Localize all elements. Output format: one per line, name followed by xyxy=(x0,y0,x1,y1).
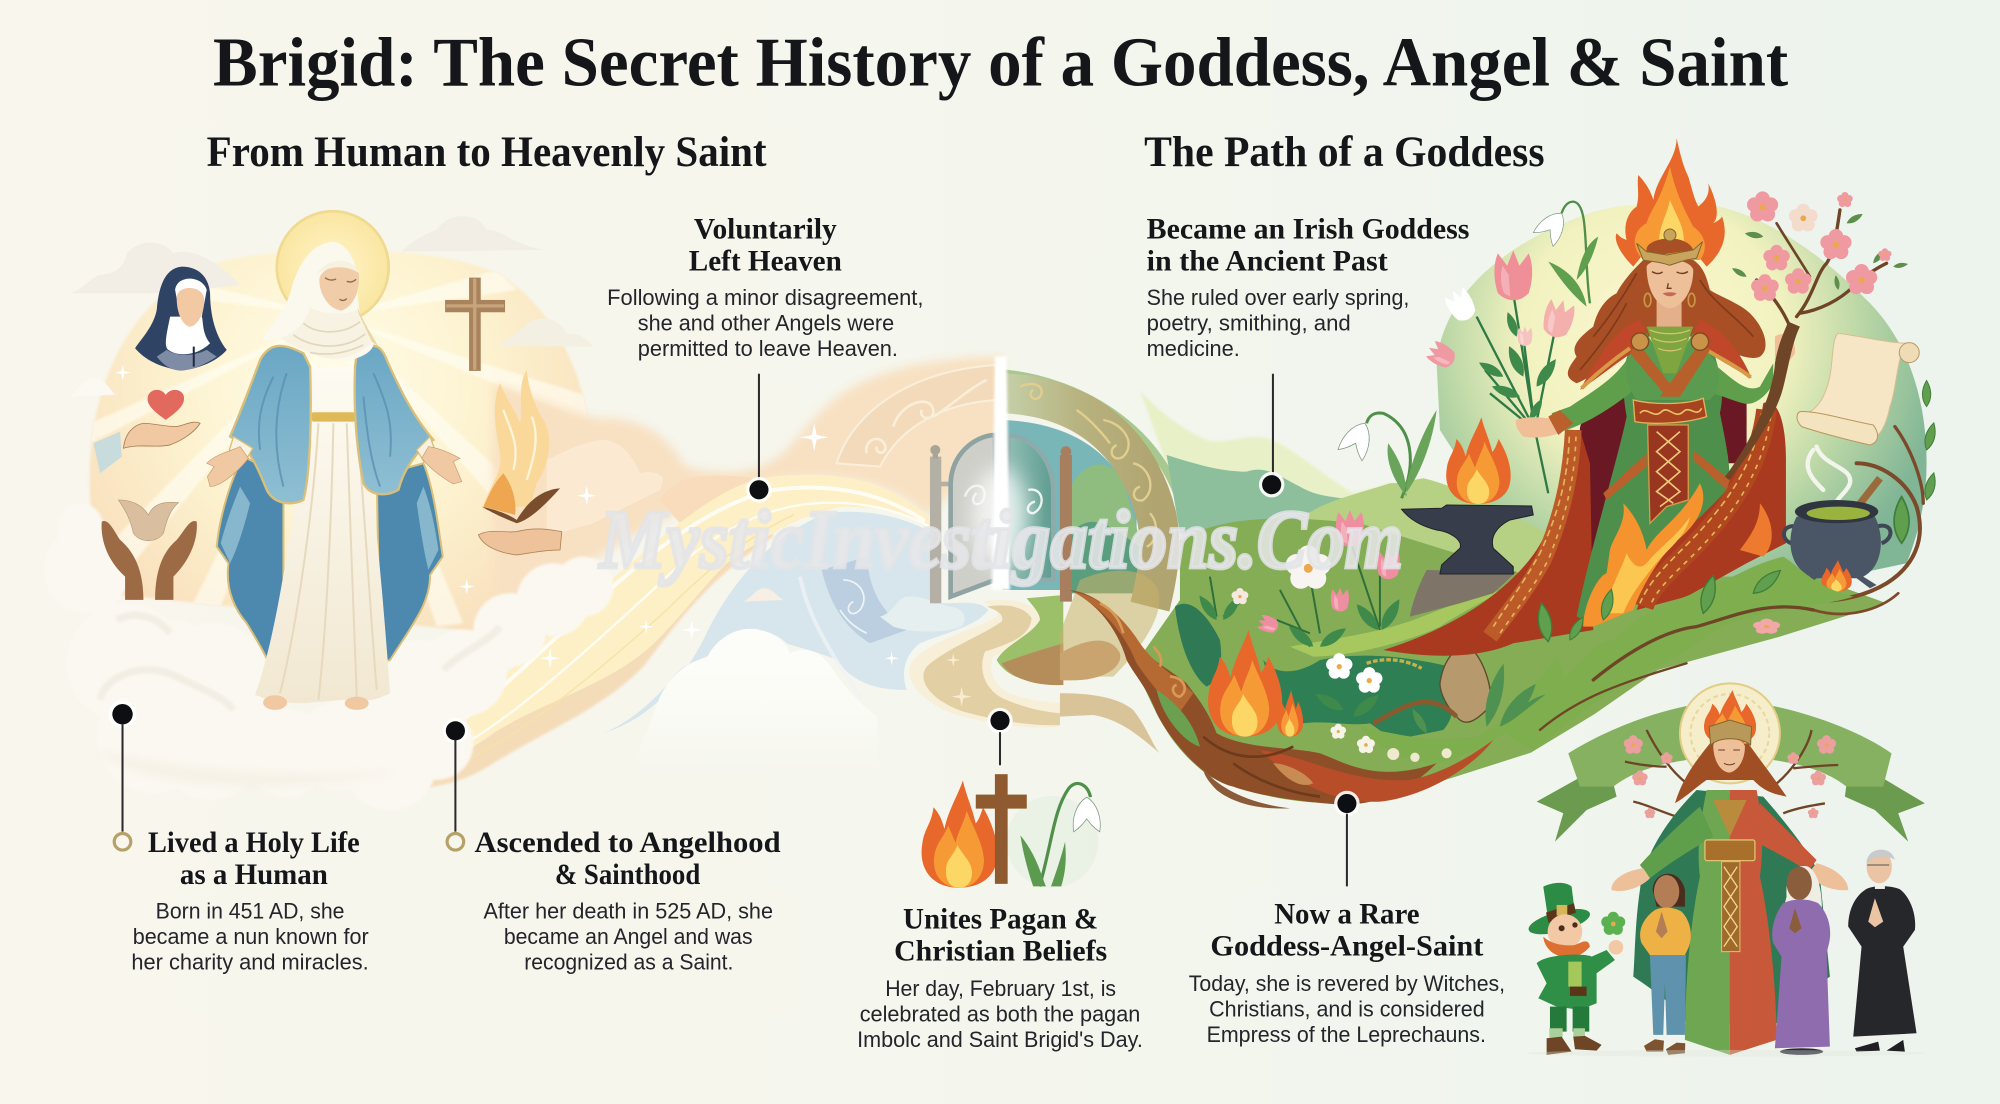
icon: heart on open hand xyxy=(93,390,200,473)
knot panel xyxy=(1722,862,1740,952)
robe right red xyxy=(1730,790,1777,1055)
text block: lived a holy life xyxy=(131,826,369,974)
flow of ribbons towards the gate xyxy=(353,357,1063,788)
gold sprig xyxy=(1367,660,1422,668)
illustration: modern Brigid and devotees xyxy=(1526,683,1927,1057)
text block: became an irish goddess xyxy=(1147,213,1469,361)
woman in yellow xyxy=(1640,874,1691,1055)
cape trims with gold knot xyxy=(1490,410,1771,637)
text block: lived a holy life: Born in 451 AD, she xyxy=(156,898,344,923)
left door xyxy=(951,435,995,597)
branches on the strip xyxy=(1540,607,1813,730)
robe left green xyxy=(1685,790,1730,1055)
halo xyxy=(1680,683,1780,783)
leprechaun xyxy=(1526,883,1625,1055)
green hill mid xyxy=(1167,455,1353,533)
snowdrop top xyxy=(1533,202,1598,307)
text block: ascended to angelhood: Ascended to Angelhood xyxy=(475,826,781,859)
text block: ascended to angelhood: After her death in 525 AD, she xyxy=(483,898,773,923)
text block: now a rare goddess-angel-saint: Goddess-Angel-Saint xyxy=(1210,929,1483,962)
text block: voluntarily left heaven xyxy=(607,213,923,361)
belt xyxy=(1705,840,1755,861)
carved stone xyxy=(1440,646,1491,722)
right sleeve xyxy=(1747,803,1817,872)
hair xyxy=(1568,257,1766,383)
background clouds xyxy=(70,216,593,397)
icon: dove and open hands xyxy=(102,500,197,600)
text block: now a rare goddess-angel-saint: Today, she is revered by Witches, xyxy=(1189,971,1505,996)
blue cloud xyxy=(880,596,965,632)
icon: wooden cross xyxy=(445,278,505,371)
text block: lived a holy life: became a nun known for xyxy=(133,924,369,949)
blossom branches xyxy=(1625,730,1838,817)
text block: voluntarily left heaven: Voluntarily xyxy=(694,213,837,246)
sand path tail xyxy=(1060,693,1160,753)
spring flowers xyxy=(1196,510,1452,762)
neck and face xyxy=(1657,300,1682,327)
bodice gold diamond xyxy=(1713,800,1747,837)
sleeves xyxy=(1552,360,1637,432)
arch lower swirls xyxy=(1060,571,1159,677)
white soft cloud xyxy=(627,629,880,783)
sparkles xyxy=(115,365,560,668)
leader line: lived a holy life xyxy=(108,700,137,850)
text block: now a rare goddess-angel-saint xyxy=(1189,897,1505,1047)
veil xyxy=(262,242,373,361)
text block: unites pagan and christian beliefs xyxy=(857,903,1143,1052)
centre panel with knot xyxy=(1648,425,1688,523)
leader line: unites beliefs xyxy=(987,708,1013,765)
title: Brigid: The Secret History of a Goddess, Angel & Saint xyxy=(213,23,1789,101)
text block: lived a holy life: her charity and miracles. xyxy=(131,949,369,974)
text block: became an irish goddess: She ruled over early spring, xyxy=(1147,285,1409,310)
red cape left xyxy=(1383,430,1593,656)
cauldron xyxy=(1784,447,1890,592)
round hill backdrop xyxy=(1437,202,1927,630)
left sleeve xyxy=(1640,807,1713,878)
blue sleeve right xyxy=(355,346,433,494)
white ribbon lines xyxy=(393,488,930,763)
text block: unites pagan and christian beliefs: Imbolc and Saint Brigid's Day. xyxy=(857,1027,1143,1052)
ground shadow xyxy=(1527,1050,1927,1057)
text block: unites pagan and christian beliefs: Christian Beliefs xyxy=(894,934,1107,967)
staff and blossoms xyxy=(1725,191,1908,480)
meadow under scene xyxy=(1380,577,1887,797)
text block: now a rare goddess-angel-saint: Now a Rare xyxy=(1274,897,1420,930)
scene: saint among clouds xyxy=(43,211,613,810)
cuffs and hands xyxy=(229,437,253,462)
text block: unites pagan and christian beliefs: Her day, February 1st, is xyxy=(885,976,1116,1001)
text block: now a rare goddess-angel-saint: Christians, and is considered xyxy=(1209,997,1485,1022)
scene: arch and green valley xyxy=(1003,373,1567,809)
peach cloud xyxy=(547,440,663,537)
gate right post xyxy=(1060,446,1072,602)
foreground cloud bank xyxy=(43,503,613,810)
text block: became an irish goddess: in the Ancient Past xyxy=(1147,244,1388,277)
text block: unites pagan and christian beliefs: Unites Pagan & xyxy=(903,903,1098,936)
woman in purple xyxy=(1772,866,1830,1055)
round hill and meadow behind goddess xyxy=(1380,202,1927,797)
scroll xyxy=(1797,333,1919,445)
green gown xyxy=(1577,350,1729,623)
icon: nun xyxy=(135,267,227,371)
grass and vine near stone xyxy=(1373,662,1555,735)
white light from gate xyxy=(992,357,1010,590)
hem flames xyxy=(1583,483,1703,627)
leader line: rare goddess-angel-saint xyxy=(1334,791,1360,886)
right door xyxy=(1008,435,1053,580)
cream ribbon band xyxy=(353,475,937,787)
layered scarf xyxy=(280,307,372,359)
text block: ascended to angelhood: & Sainthood xyxy=(555,858,701,891)
flame crown xyxy=(1616,138,1725,267)
goddess right hand xyxy=(1775,334,1795,363)
text block: voluntarily left heaven: Following a minor disagreement, xyxy=(607,285,923,310)
shoulder capes xyxy=(1580,320,1647,390)
red cape right xyxy=(1637,402,1786,610)
green banner xyxy=(1537,706,1925,842)
text block: lived a holy life: as a Human xyxy=(180,858,328,891)
white gown xyxy=(255,367,390,703)
long hair xyxy=(1675,743,1787,803)
celtic knot panel xyxy=(822,557,907,643)
goddess and surroundings xyxy=(1383,138,1938,750)
halo xyxy=(277,211,389,323)
celtic swirls on arch xyxy=(1020,384,1156,547)
text block: ascended to angelhood: became an Angel and was xyxy=(504,924,753,949)
icon: fire, cross and snowdrop xyxy=(922,774,1100,888)
small distant cloud xyxy=(743,588,783,602)
leader line: irish goddess xyxy=(1259,374,1284,497)
gate left post and bar xyxy=(930,445,954,603)
sparkles xyxy=(577,423,899,665)
lower grass strip xyxy=(1360,657,1567,763)
bouquet xyxy=(1424,250,1577,493)
dark cape lining xyxy=(1567,383,1640,613)
peach celtic arch xyxy=(837,365,997,467)
anvil xyxy=(1402,505,1533,574)
sand path xyxy=(909,600,1060,728)
snowdrop by the anvil xyxy=(1338,410,1437,498)
cape-side leaves and strip of grass xyxy=(1500,557,1853,750)
saint figure xyxy=(207,211,462,710)
forge flame xyxy=(1446,417,1511,504)
peach sky band xyxy=(493,357,1003,617)
gate xyxy=(930,357,1053,603)
crown xyxy=(1647,238,1693,257)
right vine xyxy=(1683,427,1923,640)
crossed bands xyxy=(1630,343,1680,397)
cloud shading xyxy=(100,615,500,710)
teal back cape xyxy=(1633,790,1830,1023)
main valley meadow xyxy=(1133,519,1567,803)
blue sleeve left xyxy=(230,346,311,503)
text block: unites pagan and christian beliefs: celebrated as both the pagan xyxy=(860,1002,1140,1027)
roots xyxy=(1070,590,1493,809)
bodice xyxy=(1626,333,1719,400)
leader line: ascended xyxy=(443,718,468,850)
text block: ascended to angelhood xyxy=(475,826,781,974)
flame crown xyxy=(1704,690,1756,745)
text block: voluntarily left heaven: permitted to leave Heaven. xyxy=(638,336,898,361)
text block: became an irish goddess: poetry, smithing, and xyxy=(1147,310,1351,335)
feet xyxy=(263,695,287,710)
heading: from human to heavenly saint: From Human to Heavenly Saint xyxy=(207,128,767,176)
side bands xyxy=(1603,453,1647,500)
rock under anvil xyxy=(1410,570,1517,617)
face xyxy=(1713,739,1745,773)
warm radiant egg behind saint xyxy=(90,249,590,643)
right arch band xyxy=(1003,373,1187,533)
deep green patches xyxy=(1175,604,1221,687)
text block: voluntarily left heaven: she and other Angels were xyxy=(638,310,894,335)
pale yellow wave xyxy=(1140,390,1393,533)
fire on the roots xyxy=(1208,630,1303,737)
text block: ascended to angelhood: recognized as a Saint. xyxy=(524,949,733,974)
face xyxy=(319,265,359,311)
deep blue mantle right xyxy=(377,463,443,663)
leaves xyxy=(1535,380,1938,643)
text block: voluntarily left heaven: Left Heaven xyxy=(689,244,842,277)
priest xyxy=(1848,850,1917,1052)
heading: the path of a goddess: The Path of a Goddess xyxy=(1144,128,1545,176)
leader line: left heaven xyxy=(746,374,772,503)
hands xyxy=(1611,868,1650,891)
pale blue flow xyxy=(603,512,988,733)
lower peach band xyxy=(353,497,773,788)
text block: became an irish goddess: Became an Irish Goddess xyxy=(1147,213,1469,246)
grass bright hill xyxy=(1303,478,1560,587)
belt xyxy=(1633,398,1707,423)
pink blossom on branch xyxy=(1753,619,1780,634)
watermark: MysticInvestigations.Com xyxy=(598,494,1403,587)
gold belt xyxy=(312,412,361,422)
text block: now a rare goddess-angel-saint: Empress of the Leprechauns. xyxy=(1207,1022,1486,1047)
sky inside arch xyxy=(1003,420,1137,590)
deep blue mantle left xyxy=(217,457,283,667)
green mound beside path xyxy=(997,595,1063,685)
icon: flame over book on hand xyxy=(478,370,562,555)
text block: lived a holy life: Lived a Holy Life xyxy=(148,826,360,859)
brooches xyxy=(1631,333,1649,350)
hill inside arch xyxy=(1070,464,1140,593)
crown xyxy=(1709,720,1752,745)
text block: became an irish goddess: medicine. xyxy=(1147,336,1240,361)
